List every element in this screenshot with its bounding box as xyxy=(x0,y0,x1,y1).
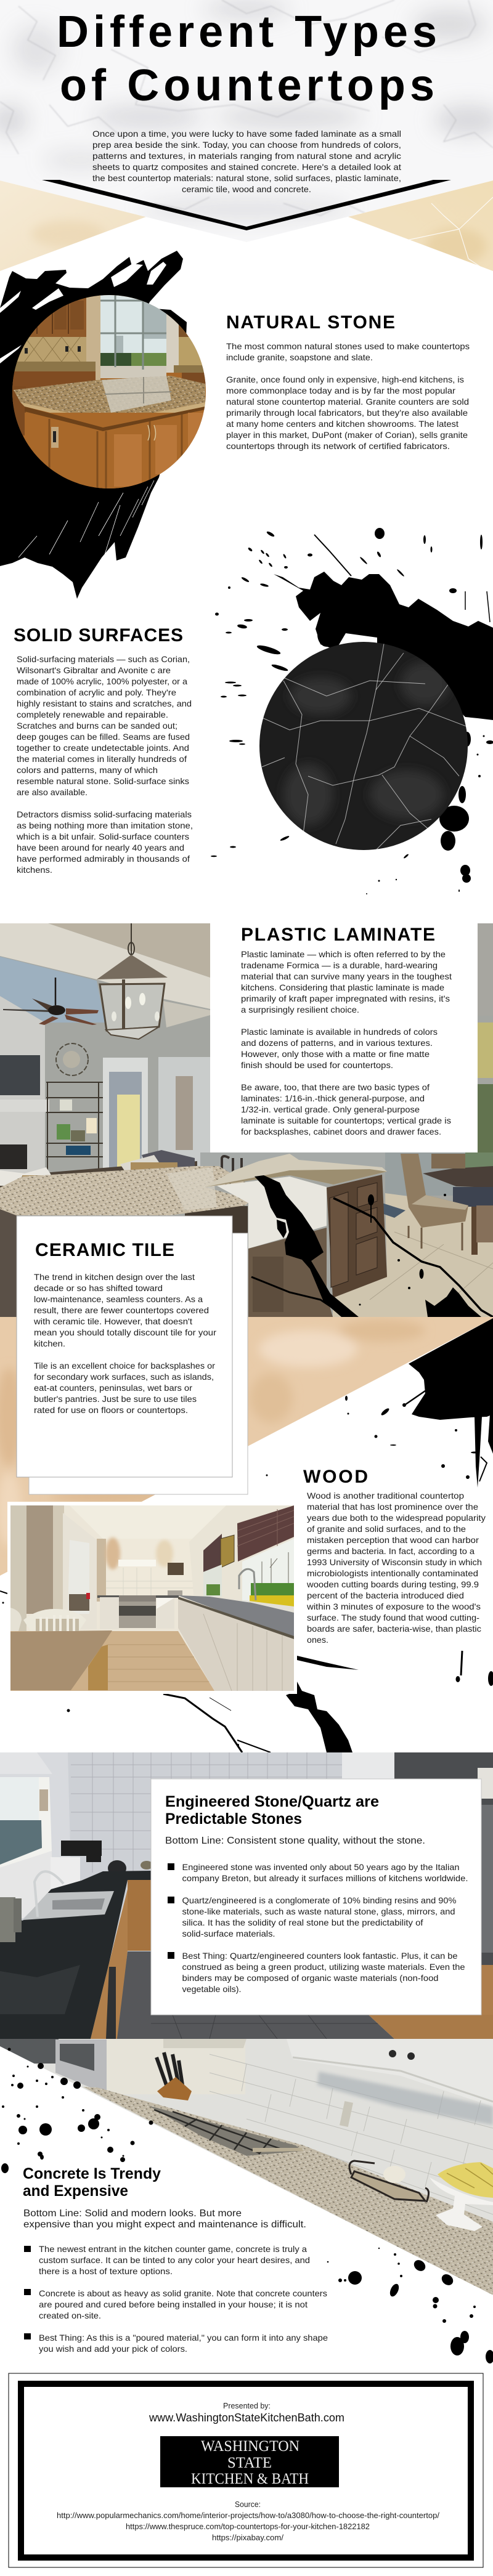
text: solid surfaces body: as being nothing more than imitation stone, xyxy=(17,821,193,830)
stove grates xyxy=(148,2105,302,2156)
heading: concrete xyxy=(23,2165,161,2200)
bullet list: engineered stone: Engineered stone was invented only about 50 years ago by the Italian xyxy=(182,1863,460,1872)
text: ceramic tile body: with ceramic tile. However, that doesn't xyxy=(33,1317,192,1326)
panel: ceramic tile front white box xyxy=(17,1216,232,1477)
text: solid surfaces body: have performed admirably in thousands of xyxy=(17,854,190,864)
island front panels xyxy=(248,1228,333,1317)
faucet xyxy=(222,1156,242,1173)
island top granite xyxy=(14,376,205,413)
text: concrete bottom line xyxy=(23,2208,306,2230)
text: sources: https://pixabay.com/ xyxy=(212,2533,284,2542)
bowl on counter xyxy=(141,1861,153,1869)
photo: natural stone kitchen circle xyxy=(12,294,206,493)
counter behind sink xyxy=(205,1154,387,1187)
text: solid surfaces body: Solid-surfacing materials — such as Corian, xyxy=(17,655,190,664)
bullet list: engineered stone: binders may be composed of organic waste materials (non-food xyxy=(182,1974,439,1983)
intro text: patterns and textures, in materials ranging from natural stone and acrylic xyxy=(92,152,401,161)
text: solid surfaces body: completely renewable and repairable. xyxy=(17,710,168,719)
floor xyxy=(10,1631,214,1691)
text: wood body: wooden cutting boards during testing, 99.9 xyxy=(306,1580,479,1589)
text: sources: https://www.thespruce.com/top-countertops-for-your-kitchen-1822182 xyxy=(126,2522,370,2531)
text: concrete bottom line: expensive than you might expect and maintenance is difficult. xyxy=(23,2219,306,2230)
panel: header marble background xyxy=(0,0,493,320)
mantel xyxy=(0,1100,49,1112)
text: ceramic tile body: rated for use on floors or countertops. xyxy=(34,1406,188,1415)
panel: plastic laminate white box xyxy=(210,923,478,1152)
wood back cabinets xyxy=(128,1880,151,1951)
text: solid surfaces body: resemble natural stone. Solid-surface sinks xyxy=(17,777,189,786)
text: plastic laminate body: tradename Formica — is a durable, hard-wearing xyxy=(241,961,438,970)
logo: Washington State Kitchen &amp; Bath: WASHINGTON xyxy=(201,2438,299,2455)
text: wood body: of granite and solid surfaces, and to the xyxy=(307,1525,466,1534)
text: solid surfaces body: Scratches and burns can be sanded out; xyxy=(17,721,177,731)
text: wood body: 1993 University of Wisconsin study in which xyxy=(307,1558,482,1567)
door frame and yellow door xyxy=(103,1058,148,1175)
bullet list: engineered stone: company Breton, but already it surfaces millions of kitchens worldwide. xyxy=(182,1874,468,1883)
text: concrete bottom line: Bottom Line: Solid and modern looks. But more xyxy=(23,2208,242,2219)
ink drip over island xyxy=(251,1175,493,1317)
bullet list: engineered stone: Best Thing: Quartz/engineered counters look fantastic. Plus, it can be xyxy=(182,1951,457,1961)
gold marble left triangle xyxy=(0,176,148,274)
text: plastic laminate body: a surprisingly resilient choice. xyxy=(241,1005,359,1015)
floor xyxy=(117,1951,394,2039)
text: presented by: Presented by: xyxy=(223,2402,271,2410)
white upper cabinets xyxy=(287,2039,493,2107)
intro text: Once upon a time, you were lucky to have some faded laminate as a small xyxy=(92,129,401,139)
text: solid surfaces body: Wilsonart's Gibraltar and Avonite c are xyxy=(17,666,171,675)
heading: plastic laminate: PLASTIC LAMINATE xyxy=(241,925,435,945)
bullet list: engineered stone xyxy=(168,1863,468,1994)
text: wood body: percent of the bacteria introduced died xyxy=(307,1591,464,1600)
text: website url: www.WashingtonStateKitchenBath.com xyxy=(149,2411,344,2424)
white chair xyxy=(23,1609,86,1631)
small window xyxy=(203,1565,222,1597)
text: solid surfaces body: made of 100% acrylic, 100% polyester, or a xyxy=(17,677,187,686)
logo: Washington State Kitchen &amp; Bath: KITCHEN & BATH xyxy=(191,2471,309,2487)
title: of Countertops xyxy=(60,61,434,110)
photo: concrete section kitchen xyxy=(0,2039,493,2298)
photo: engineered stone kitchen xyxy=(0,1752,493,2039)
heading: engineered stone: Engineered Stone/Quartz are xyxy=(165,1793,379,1810)
heading: solid surfaces: SOLID SURFACES xyxy=(14,625,183,646)
text: plastic laminate body: finish should be used for countertops. xyxy=(241,1061,393,1070)
heading: ceramic tile: CERAMIC TILE xyxy=(35,1240,174,1260)
coffee maker and kettle xyxy=(61,1841,102,1856)
photo: plastic laminate kitchen and living room xyxy=(0,923,493,1317)
text: ceramic tile body: eat-at counters, peninsulas, wet bars or xyxy=(34,1383,192,1393)
photo: black marble circle xyxy=(259,641,468,851)
bullet list: concrete xyxy=(24,2245,328,2354)
title: Different Types xyxy=(57,7,437,57)
text: wood body: material that has lost prominence over the xyxy=(307,1502,478,1512)
text: ceramic tile body: decade or so has shifted toward xyxy=(34,1284,163,1293)
intro text: sheets to quartz composites and stained concrete. Here's a detailed look at xyxy=(92,163,401,172)
main window view xyxy=(242,1539,294,1609)
text: ceramic tile body: low-maintenance, seamless counters. As a xyxy=(34,1295,203,1304)
counter top xyxy=(178,1595,294,1638)
knife block xyxy=(157,2052,192,2100)
heading: concrete: and Expensive xyxy=(23,2182,128,2200)
text: natural stone body: countertops through its network of certified fabricators. xyxy=(226,442,450,451)
photo: wood kitchen with white border xyxy=(7,1502,297,1694)
text: plastic laminate body: However, only those with a matte or fine matte xyxy=(241,1050,430,1059)
text: plastic laminate body: material that can survive many years in the toughest xyxy=(241,972,452,981)
plants xyxy=(100,353,131,366)
ceiling xyxy=(70,1505,226,1542)
text: wood body xyxy=(306,1491,486,1645)
window band and right side xyxy=(200,1152,210,1166)
text: natural stone body: primarily through local fabricators, but they're also available xyxy=(226,408,468,418)
island side xyxy=(327,1175,387,1298)
title xyxy=(57,7,437,110)
column xyxy=(86,294,100,380)
picture frame xyxy=(221,1535,234,1568)
text: plastic laminate body: laminate is suitable for countertops; vertical grade is xyxy=(241,1116,451,1125)
text: wood body: within 3 minutes of exposure to the wood's xyxy=(306,1602,481,1611)
panel: footer frame xyxy=(9,2373,483,2567)
text: natural stone body: more commonplace today and is by far the most popular xyxy=(226,386,456,395)
marble top area xyxy=(0,0,493,246)
text: solid surfaces body: have been around for nearly 40 years and xyxy=(17,843,184,853)
text: ceramic tile body xyxy=(33,1273,217,1415)
text: sources: http://www.popularmechanics.com/home/interior-projects/how-to/a3080/how-to-choose-the-right-countertop/ xyxy=(57,2511,440,2520)
dining table and chairs xyxy=(423,1166,493,1188)
text: plastic laminate body: for backsplashes, cabinet doors and drawer faces. xyxy=(241,1127,441,1136)
dark appliance left xyxy=(0,2039,59,2064)
bullet list: concrete: created on-site. xyxy=(39,2311,101,2320)
text: ceramic tile body: butler's pantries. Just be sure to use tiles xyxy=(34,1395,197,1404)
text: solid surfaces body: together to create undetectable joints. And xyxy=(17,743,189,753)
bullet list: engineered stone: construed as being a green product, utilizing waste materials. Even the xyxy=(182,1962,465,1972)
heading: concrete: Concrete Is Trendy xyxy=(23,2165,161,2182)
text: natural stone body: The most common natural stones used to make countertops xyxy=(226,342,470,351)
text: plastic laminate body: Plastic laminate is available in hundreds of colors xyxy=(241,1027,438,1037)
upper cabinets xyxy=(30,298,87,337)
text: solid surfaces body: the material comes in literally hundreds of xyxy=(17,755,187,764)
stove xyxy=(119,1595,156,1628)
bullet list: engineered stone: Quartz/engineered is a conglomerate of 10% binding resins and 90% xyxy=(182,1896,456,1905)
text: solid surfaces body: deep gouges can be filled. Seams are fused xyxy=(17,732,190,742)
text: solid surfaces body: colors and patterns, many of which xyxy=(17,766,158,775)
floor xyxy=(333,1193,493,1317)
bullet list: engineered stone: solid-surface materials. xyxy=(182,1929,275,1938)
window xyxy=(100,295,166,353)
text: plastic laminate body: primarily of kraft paper impregnated with resins, it's xyxy=(241,994,450,1003)
faucet xyxy=(239,1569,256,1600)
bullet list: concrete: Concrete is about as heavy as solid granite. Note that concrete counters xyxy=(39,2289,327,2298)
text: ceramic tile body: kitchen. xyxy=(34,1339,65,1348)
wall below window xyxy=(0,1851,52,1919)
bullet list: concrete: you wish and add your pick of colors. xyxy=(39,2344,187,2354)
left counter xyxy=(97,1595,119,1598)
text: solid surfaces body: which is a bit unfair. Solid-surface counters xyxy=(16,832,189,841)
text: natural stone body: natural stone countertop material. Granite counters are sold xyxy=(226,397,469,407)
icon: black ink splatter for solid surfaces xyxy=(211,528,493,894)
text: wood body: microbiologists intentionally contaminated xyxy=(307,1569,478,1578)
text: solid surfaces body: kitchens. xyxy=(17,865,52,875)
dark under counter cabinets xyxy=(0,1207,17,1317)
bullet list: concrete: there is a host of texture options. xyxy=(39,2267,173,2276)
panel: beige marble diagonal xyxy=(0,1317,493,1577)
granite counter xyxy=(83,2087,493,2295)
text: plastic laminate body: kitchens. Considering that plastic laminate is made xyxy=(241,983,444,992)
farmhouse sink xyxy=(217,1177,327,1249)
text: solid surfaces body: highly resistant to stains and scratches, and xyxy=(17,699,192,708)
text: natural stone body: player in this market, DuPont (maker of Corian), sells granite xyxy=(226,431,468,440)
heading: natural stone: NATURAL STONE xyxy=(226,312,395,333)
black counter xyxy=(0,1871,151,2039)
fireplace stone wall xyxy=(0,996,45,1177)
text: plastic laminate body: and dozens of patterns, and in various textures. xyxy=(241,1039,433,1048)
text: plastic laminate body: Be aware, too, that there are two basic types of xyxy=(241,1083,430,1092)
left angled wall xyxy=(0,1752,71,1903)
gold marble right triangle xyxy=(348,180,493,271)
text: sources xyxy=(57,2500,440,2542)
bullet list: engineered stone: silica. It has the solidity of real stone but the predictability of xyxy=(182,1918,423,1927)
text: ceramic tile body: result, there are fewer countertops covered xyxy=(34,1306,209,1315)
lantern xyxy=(97,923,168,1039)
text: solid surfaces body: Detractors dismiss solid-surfacing materials xyxy=(17,810,192,819)
blinds 1 xyxy=(203,1534,222,1572)
sun mirror xyxy=(56,1043,88,1075)
tile grid xyxy=(71,1752,345,1873)
heading: wood: WOOD xyxy=(303,1467,368,1487)
cake stand with bananas xyxy=(430,2177,493,2231)
text: wood body: boards are safer, bacteria-wise, than plastic xyxy=(307,1624,481,1634)
bullet list: engineered stone: stone-like materials, such as waste natural stone, glass, mirrors, and xyxy=(182,1907,455,1916)
intro text: the best countertop materials: natural stone, solid surfaces, plastic laminate, xyxy=(92,174,401,183)
text: ceramic tile body: Tile is an excellent choice for backsplashes or xyxy=(34,1361,215,1371)
logo: Washington State Kitchen &amp; Bath: STATE xyxy=(227,2455,272,2471)
island base wood panels xyxy=(25,413,206,493)
right wood cabinets xyxy=(369,2015,493,2039)
panel: engineered stone white box xyxy=(151,1779,481,2015)
tv xyxy=(0,1055,40,1095)
subway tiles xyxy=(210,2054,493,2214)
bullet list: concrete: are poured and cured before being installed in your house; it is not xyxy=(39,2300,308,2309)
text: wood body: Wood is another traditional countertop xyxy=(307,1491,464,1501)
sofa and pillows xyxy=(0,1161,197,1188)
text: plastic laminate body: 1/32-in. vertical grade. Only general-purpose xyxy=(241,1105,420,1114)
window with sea xyxy=(0,1777,52,1868)
blinds 2 xyxy=(237,1505,294,1561)
icon: black ink brush stroke behind natural stone photo xyxy=(0,251,187,599)
back wall xyxy=(106,1539,197,1595)
fireplace opening xyxy=(0,1144,27,1169)
bullet list: concrete: Best Thing: As this is a "poured material," you can form it into any shape xyxy=(39,2333,328,2343)
rug xyxy=(382,1203,405,1218)
heading: engineered stone xyxy=(165,1793,379,1828)
text: solid surfaces body: are also available. xyxy=(17,788,88,797)
text: wood body: years due both to the widespread popularity xyxy=(307,1513,486,1523)
text: ceramic tile body: The trend in kitchen design over the last xyxy=(34,1273,195,1282)
icon: ink dots splatter around concrete section xyxy=(1,2047,493,2363)
cream wall xyxy=(107,2039,245,2094)
text: wood body: surface. The study found that wood cutting- xyxy=(307,1613,479,1622)
heading: engineered stone: Predictable Stones xyxy=(165,1810,302,1828)
backsplash xyxy=(12,337,88,363)
granite counter xyxy=(0,1166,251,1215)
bullet list: engineered stone: vegetable oils). xyxy=(182,1985,242,1994)
text: ceramic tile body: for secondary work surfaces, such as islands, xyxy=(34,1372,214,1382)
text: plastic laminate body: laminates: 1/16-in.-thick general-purpose, and xyxy=(241,1094,425,1103)
panel: ceramic tile back white box xyxy=(29,1233,248,1494)
intro text: prep area beside the sink. Today, you can choose from hundreds of colors, xyxy=(92,140,401,150)
text: engineered bottom line: Bottom Line: Consistent stone quality, without the stone. xyxy=(165,1836,425,1846)
shelf xyxy=(46,1082,104,1170)
text: natural stone body: at many home centers and kitchen showrooms. The latest xyxy=(226,419,458,429)
text: natural stone body xyxy=(226,342,470,451)
text: solid surfaces body xyxy=(16,655,193,875)
text: wood body: germs and bacteria. In fact, according to a xyxy=(307,1547,475,1556)
text: natural stone body: include granite, soapstone and slate. xyxy=(226,353,373,362)
tray xyxy=(351,2171,425,2201)
table xyxy=(10,1630,112,1690)
text: plastic laminate body xyxy=(241,950,452,1136)
intro text xyxy=(92,129,401,194)
ceiling fan xyxy=(3,978,99,1025)
hood and backsplash xyxy=(118,1560,156,1566)
canisters xyxy=(0,1897,15,1942)
dark right wall xyxy=(394,1752,493,2039)
right wall xyxy=(189,1505,294,1614)
text: wood body: ones. xyxy=(307,1635,328,1645)
intro text: ceramic tile, wood and concrete. xyxy=(182,185,311,194)
text: wood body: mistaken perception that wood can harbor xyxy=(307,1536,479,1545)
text: ceramic tile body: mean you should totally discount tile for your xyxy=(34,1328,217,1337)
logo: Washington State Kitchen &amp; Bath xyxy=(160,2436,339,2487)
icon: ink splatter around wood section xyxy=(0,1318,493,1752)
window xyxy=(158,1057,210,1177)
text: plastic laminate body: Plastic laminate — which is often referred to by the xyxy=(241,950,446,959)
text: natural stone body: Granite, once found only in expensive, high-end kitchens, is xyxy=(226,375,464,384)
sink and faucet xyxy=(23,1891,114,1920)
side wood cabinet xyxy=(91,1889,128,2039)
text: solid surfaces body: combination of acrylic and poly. They're xyxy=(17,688,176,697)
ceiling xyxy=(48,923,210,978)
arrow: header chevron xyxy=(42,180,451,230)
base cabinets xyxy=(178,1598,294,1691)
text: sources: Source: xyxy=(235,2500,261,2509)
bullet list: concrete: The newest entrant in the kitchen counter game, concrete is truly a xyxy=(39,2245,307,2254)
left pillar and doorway xyxy=(10,1505,26,1632)
bullet list: concrete: custom surface. It can be tinted to any color your heart desires, and xyxy=(39,2256,310,2265)
